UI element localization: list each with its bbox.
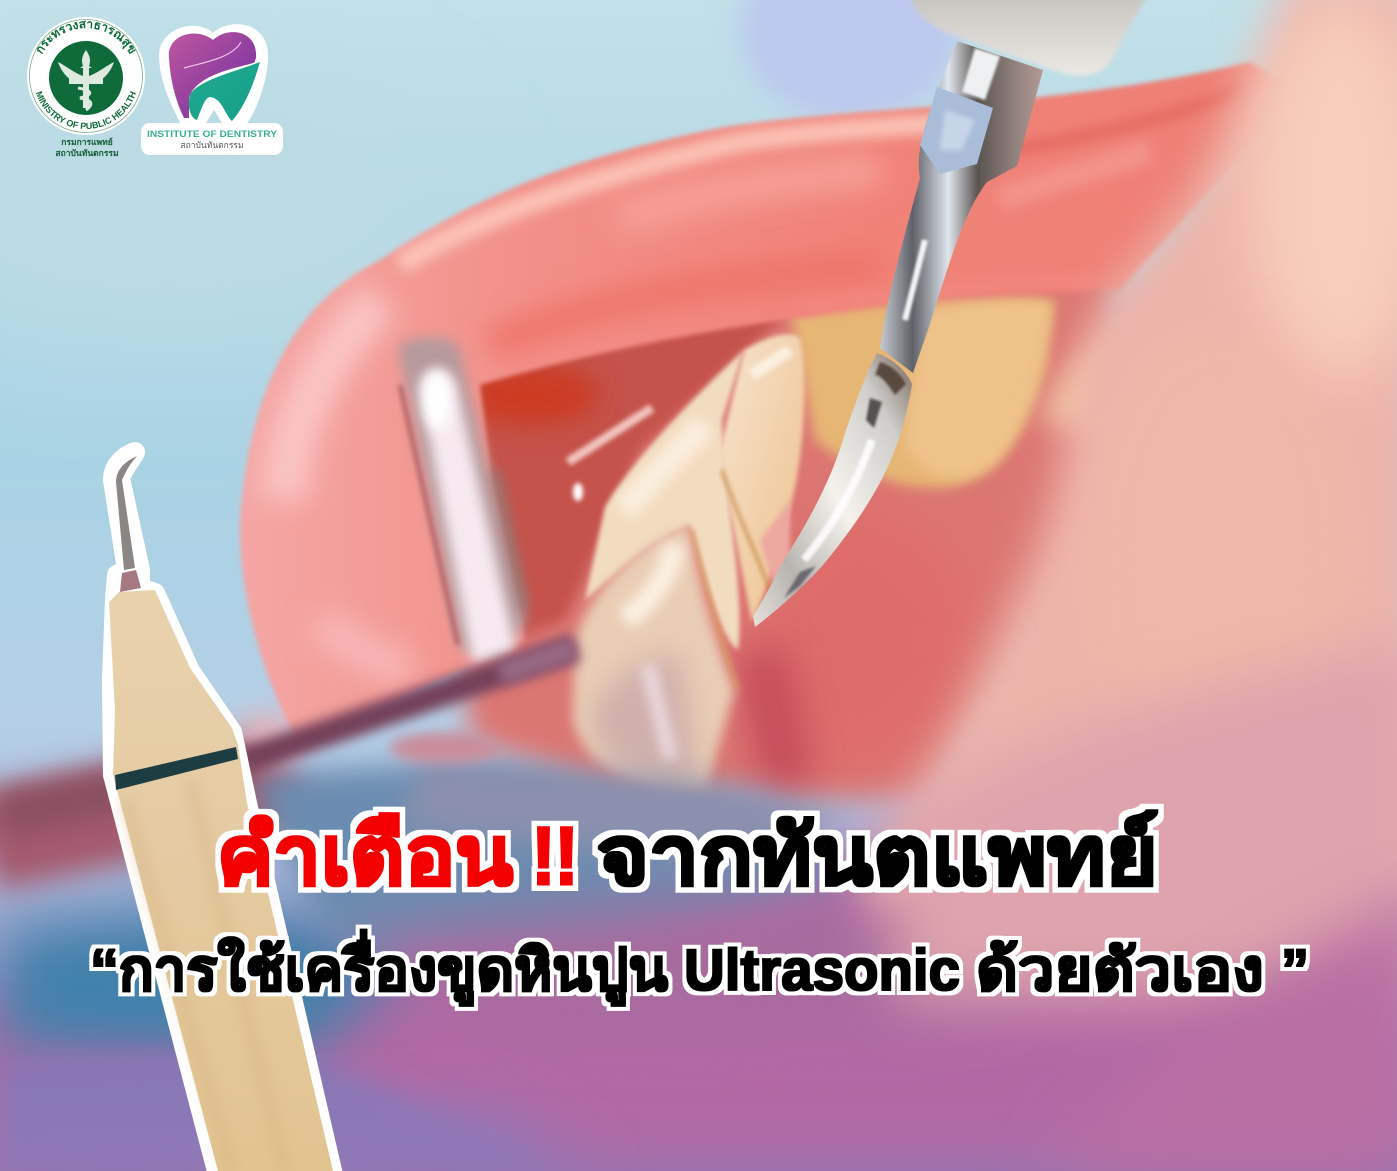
subtitle: self-use ultrasonic scaler: Ultrasonic (684, 938, 960, 1003)
logo: Ministry of Public Health seal: สถาบันทันตกรรม (55, 148, 119, 158)
logo: Institute of Dentistry (141, 25, 283, 155)
subtitle: self-use ultrasonic scaler: “การใช้เครื่องขูดหินปูน (90, 929, 668, 1006)
icon: ultrasonic scaler handpiece (109, 452, 333, 1171)
logo: Ministry of Public Health seal (27, 17, 145, 158)
subtitle: self-use ultrasonic scaler: ด้วยตัวเอง (976, 938, 1264, 1003)
logo: Ministry of Public Health seal: กระทรวงสาธารณสุข (37, 20, 136, 54)
photo: cheek foreground (860, 0, 1397, 1171)
photo: ultrasonic scaler tip (753, 0, 1147, 627)
title: warning headline: คำเตือน (217, 811, 513, 902)
logo: Institute of Dentistry: INSTITUTE OF DENTISTRY (147, 129, 278, 139)
logo: Ministry of Public Health seal: กรมการแพทย์ (61, 137, 113, 147)
photo: mouth interior and gums (430, 250, 1120, 800)
seal emblem: caduceus with wings (58, 50, 114, 110)
logo: Institute of Dentistry: สถาบันทันตกรรม (180, 140, 244, 150)
subtitle: self-use ultrasonic scaler: ” (1281, 938, 1309, 1003)
logo: Ministry of Public Health seal: MINISTRY OF PUBLIC HEALTH (36, 91, 136, 129)
photo: upper lip (240, 62, 1300, 745)
photo: teeth (573, 298, 1120, 790)
title: warning headline: !! (532, 811, 578, 902)
photo: lip highlights (285, 90, 1240, 670)
photo: dental mirror (0, 338, 575, 815)
title: warning headline: จากทันตแพทย์ (597, 810, 1158, 902)
photo: blurred foreground fade below teeth (235, 713, 850, 860)
